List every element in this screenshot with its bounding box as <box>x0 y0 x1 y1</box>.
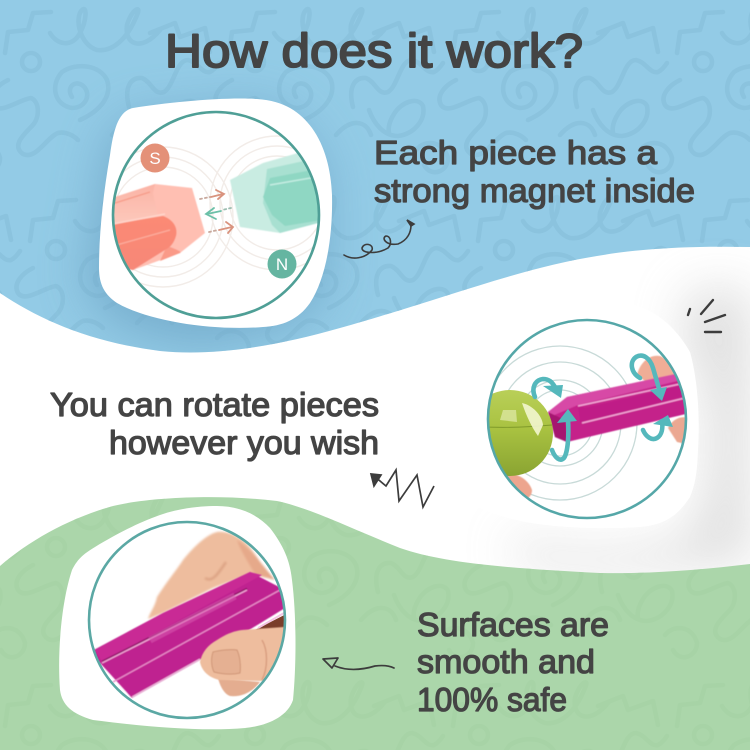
text: rotate caption: however you wish <box>109 424 379 461</box>
panel: smooth surface card <box>59 506 296 729</box>
north magnet piece <box>230 153 322 233</box>
panel: magnet card <box>85 99 344 345</box>
finger bottom left <box>508 475 533 498</box>
illustration: rotating magnet <box>489 345 685 501</box>
arrow: zigzag arrow <box>371 470 434 507</box>
card 1 shadow <box>85 108 325 345</box>
white edge by thumb <box>258 613 284 628</box>
background doodle pattern: green <box>0 497 750 750</box>
card 3 background <box>59 506 296 729</box>
lower thumb <box>200 627 284 681</box>
text: magnet caption: strong magnet inside <box>374 172 695 209</box>
magenta rod <box>90 572 285 698</box>
field rings <box>483 346 637 500</box>
text: rotate caption <box>50 386 379 461</box>
ring <box>113 112 319 318</box>
text: safe caption: Surfaces are <box>417 606 609 643</box>
background doodle pattern: blue <box>0 0 750 352</box>
finger top right <box>637 355 674 381</box>
text: safe caption: smooth and <box>417 643 595 680</box>
text: safe caption <box>417 606 609 718</box>
text: rotate caption: You can rotate pieces <box>50 386 379 423</box>
green background band <box>0 497 750 750</box>
card 1 background <box>99 99 332 328</box>
photo: hand holding rod <box>90 532 290 698</box>
ring <box>488 320 686 518</box>
badge S <box>140 144 170 172</box>
blue background band <box>0 0 750 352</box>
rotation arrows <box>533 356 673 460</box>
ring <box>89 522 285 718</box>
white middle band shadow <box>510 290 750 572</box>
icon: spark lines <box>688 300 725 332</box>
badge N: N <box>276 255 288 274</box>
arrow: curved left arrow <box>323 658 394 669</box>
pink rod <box>548 371 690 442</box>
lower finger <box>218 678 260 696</box>
panel: rotate card <box>486 318 698 520</box>
badge N <box>268 250 296 278</box>
arrow: curly arrow up <box>344 220 414 258</box>
south magnet piece <box>112 184 205 270</box>
upper fingers <box>148 532 275 619</box>
illustration: magnetic field and poles <box>114 135 318 288</box>
attraction arrows <box>200 190 233 233</box>
text: magnet caption <box>374 134 695 209</box>
badge S: S <box>149 149 161 168</box>
text: magnet caption: Each piece has a <box>374 134 658 171</box>
finger bottom right <box>668 416 685 444</box>
green ball <box>489 390 553 476</box>
title: How does it work? <box>165 24 583 77</box>
dark background gap <box>256 615 284 630</box>
card 2 background <box>461 303 699 528</box>
text: safe caption: 100% safe <box>417 681 567 718</box>
